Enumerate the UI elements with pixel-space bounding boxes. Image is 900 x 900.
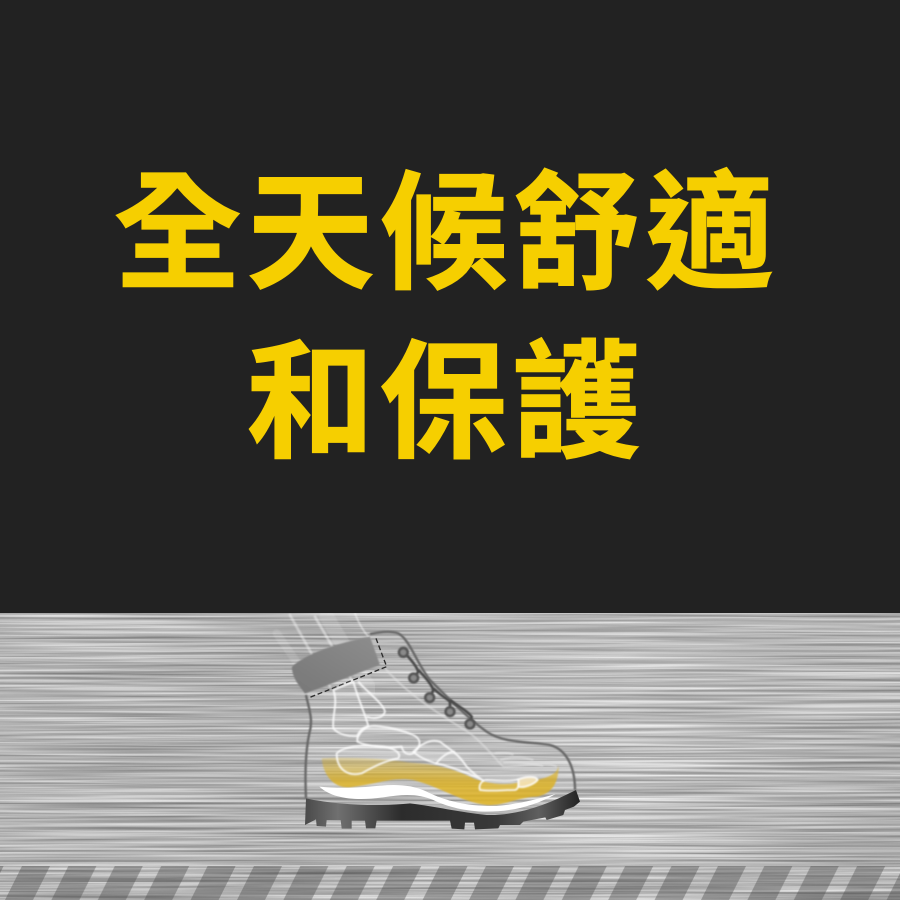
yellow footbed bbox=[322, 758, 559, 805]
metal background bbox=[0, 613, 900, 900]
leg bones streaks bbox=[277, 613, 370, 690]
laces and eyelets bbox=[399, 648, 474, 728]
panel: brushed metal floor with boot bbox=[0, 613, 900, 900]
hazard stripes bbox=[0, 866, 900, 900]
white midsole bbox=[319, 785, 556, 812]
boot cuff bbox=[292, 637, 380, 693]
boot outsole bbox=[305, 790, 580, 829]
boot illustration bbox=[277, 613, 580, 829]
foot bones bbox=[333, 682, 538, 791]
inner seam bbox=[385, 668, 557, 767]
boot body bbox=[305, 632, 575, 798]
cuff stitching bbox=[310, 638, 387, 697]
title line 2: 和保護 bbox=[246, 332, 646, 475]
title line 1: 全天候舒適 bbox=[113, 163, 778, 306]
toe details bbox=[495, 753, 543, 766]
boot outline bbox=[305, 632, 575, 798]
